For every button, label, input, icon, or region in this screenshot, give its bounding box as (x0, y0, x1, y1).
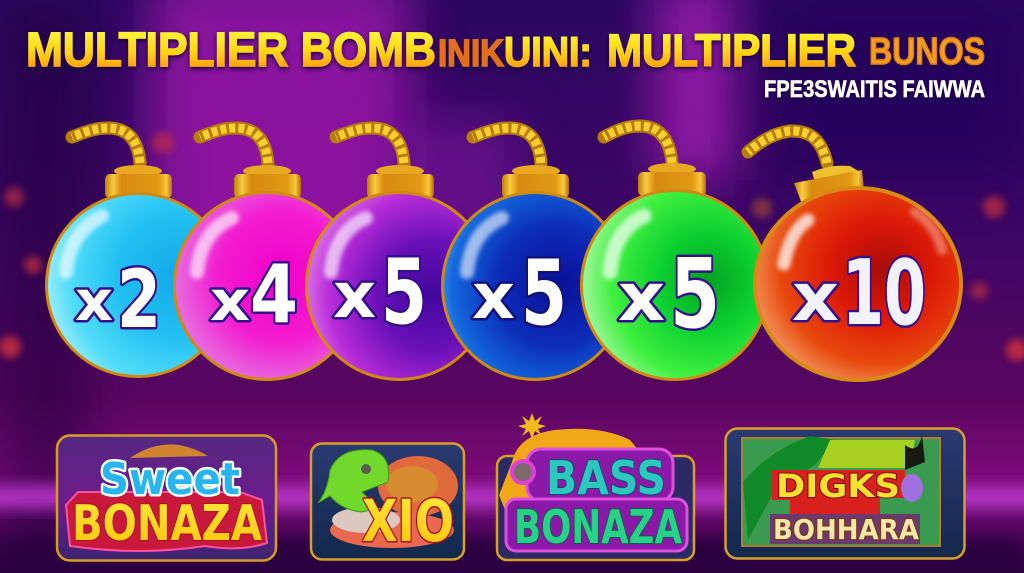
logo text Digks: DIGKS (776, 467, 900, 505)
card: Bass Bonanza (497, 413, 694, 560)
logo text x10: XIO (362, 487, 454, 555)
bomb x5 green (580, 126, 770, 381)
bomb x2 (45, 128, 231, 378)
multiplier label x4: x (210, 269, 250, 333)
icon: spark (518, 413, 546, 439)
multiplier label x2: x (75, 269, 113, 333)
multiplier label x5 blue: 5 (521, 241, 567, 346)
multiplier label x10: 10 (842, 241, 926, 346)
title: INIK (438, 33, 504, 75)
title (26, 24, 985, 77)
multiplier label x2 (75, 253, 161, 346)
multiplier label x10: x (792, 259, 839, 336)
multiplier label x4 (210, 248, 298, 341)
bomb x4 (173, 128, 361, 381)
multiplier label x10 (792, 241, 926, 346)
card: Digks Bonhara (726, 428, 964, 558)
multiplier label x5 green: x (618, 259, 665, 336)
multiplier label x5 blue (472, 241, 567, 346)
bomb x10 (748, 131, 963, 382)
bomb x5 blue (441, 128, 629, 381)
title: BUNOS (869, 31, 985, 73)
multiplier label x5 purple: x (333, 259, 376, 332)
icon: chameleon (318, 450, 389, 512)
card: x10 chameleon (311, 444, 464, 560)
subtitle: FPE3SWAITIS FAIWWA (764, 76, 985, 103)
logo text Bonaza: BONAZA (514, 500, 682, 554)
logo text Bonaza: BONAZA (72, 495, 262, 552)
logo text Bonhara: BOHHARA (773, 513, 919, 546)
multiplier label x5 blue: x (472, 260, 515, 333)
multiplier label x5 green: 5 (670, 238, 720, 350)
title: MULTIPLIER (607, 25, 856, 76)
multiplier label x5 purple: 5 (381, 240, 427, 345)
logo text Sweet: Sweet (100, 454, 240, 505)
logo text Bass: BASS (546, 451, 666, 505)
bomb x5 purple (305, 128, 493, 381)
card: Sweet Bonanza (57, 436, 276, 560)
title: MULTIPLIER BOMB (26, 24, 436, 77)
multiplier label x4: 4 (250, 248, 298, 341)
multiplier label x5 purple (333, 240, 427, 345)
multiplier label x5 green (618, 238, 720, 350)
title: UINI: (504, 28, 592, 75)
multiplier label x2: 2 (117, 253, 161, 346)
